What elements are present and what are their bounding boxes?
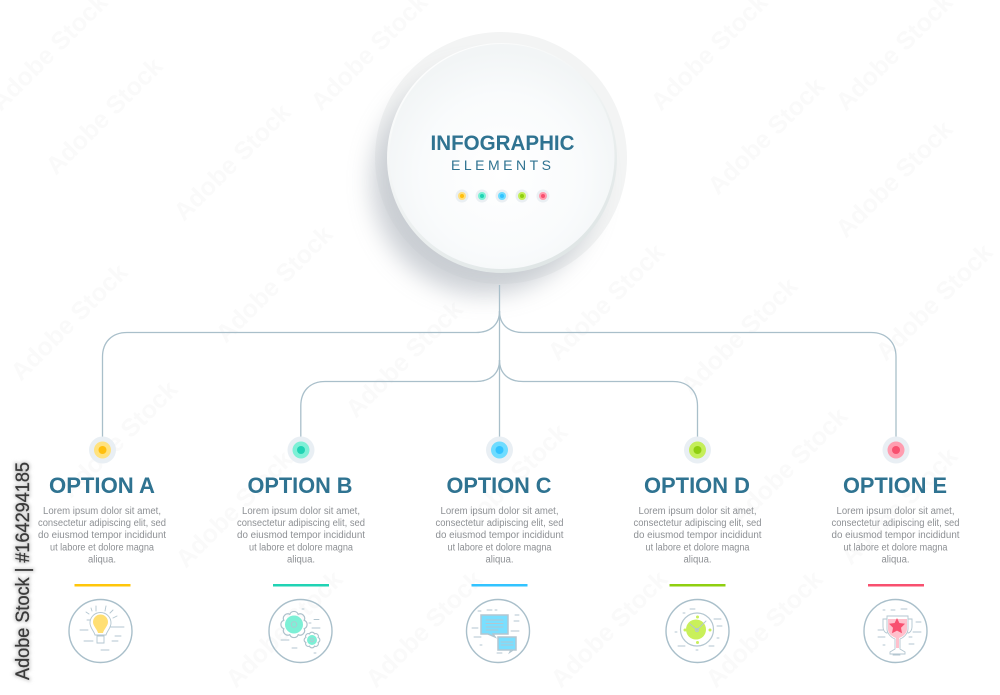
- text: Adobe Stock: [40, 52, 168, 180]
- icon: light bulb: [69, 600, 132, 662]
- text: Adobe Stock: [675, 272, 803, 400]
- icon: clock: [666, 600, 729, 662]
- text: Adobe Stock: [870, 238, 998, 366]
- body E: Lorem ipsum dolor sit amet,: [836, 506, 954, 517]
- body B: do eiusmod tempor incididunt: [237, 530, 365, 541]
- side credit text: Adobe Stock | #164294185: [13, 462, 34, 680]
- text: Adobe Stock: [545, 565, 673, 693]
- body B: aliqua.: [287, 554, 315, 566]
- subtitle: elements: ELEMENTS: [451, 157, 551, 173]
- heading D: OPTION D: [644, 473, 750, 498]
- body A: [38, 506, 166, 566]
- option B column: [237, 436, 365, 662]
- text: Adobe Stock: [340, 295, 468, 423]
- marker B: [288, 436, 314, 464]
- body B: ut labore et dolore magna: [249, 542, 353, 554]
- text: Adobe Stock: [445, 418, 573, 546]
- text: Adobe Stock: [725, 402, 853, 530]
- accent bar A: [74, 584, 130, 586]
- text: Adobe Stock: [168, 98, 296, 226]
- connector lines: [102, 285, 896, 438]
- text: Adobe Stock: [170, 445, 298, 573]
- body D: consectetur adipiscing elit, sed: [634, 518, 762, 529]
- text: Adobe Stock: [830, 115, 958, 243]
- body C: aliqua.: [486, 554, 514, 566]
- body A: Lorem ipsum dolor sit amet,: [43, 506, 161, 517]
- marker C: [486, 436, 513, 464]
- option E column: [832, 436, 960, 662]
- accent bar E: [868, 584, 924, 586]
- body E: consectetur adipiscing elit, sed: [832, 518, 960, 529]
- icon: gears: [269, 600, 332, 662]
- marker E: [882, 436, 910, 464]
- body D: Lorem ipsum dolor sit amet,: [638, 506, 756, 517]
- body A: consectetur adipiscing elit, sed: [38, 518, 166, 529]
- heading C: OPTION C: [446, 473, 552, 498]
- body D: do eiusmod tempor incididunt: [634, 530, 762, 541]
- body E: do eiusmod tempor incididunt: [832, 530, 960, 541]
- body C: ut labore et dolore magna: [448, 542, 552, 554]
- body D: ut labore et dolore magna: [646, 542, 750, 554]
- body A: do eiusmod tempor incididunt: [38, 530, 166, 541]
- heading E: OPTION E: [843, 473, 947, 498]
- body C: consectetur adipiscing elit, sed: [436, 518, 564, 529]
- marker A: [89, 436, 116, 464]
- body A: aliqua.: [88, 554, 116, 566]
- option A column: [38, 436, 166, 662]
- icon: trophy: [864, 600, 927, 662]
- accent bar C: [472, 584, 528, 586]
- body B: [237, 506, 365, 566]
- central circle: [372, 32, 627, 294]
- icon: speech bubbles: [466, 600, 530, 662]
- body B: Lorem ipsum dolor sit amet,: [242, 506, 360, 517]
- text: Adobe Stock: [700, 565, 828, 693]
- option D column: [634, 436, 762, 662]
- body E: [832, 506, 960, 566]
- text: Adobe Stock: [360, 565, 488, 693]
- side credit text: Adobe Stock | #164294185: [13, 462, 34, 680]
- text: Adobe Stock: [220, 565, 348, 693]
- body D: aliqua.: [684, 554, 712, 566]
- central colour dots: [456, 190, 550, 202]
- body C: Lorem ipsum dolor sit amet,: [440, 506, 558, 517]
- body C: [436, 506, 564, 566]
- body D: [634, 506, 762, 566]
- text: Adobe Stock: [542, 238, 670, 366]
- body B: consectetur adipiscing elit, sed: [237, 518, 365, 529]
- body E: ut labore et dolore magna: [844, 542, 948, 554]
- accent bar B: [273, 584, 329, 586]
- text: Adobe Stock: [5, 258, 133, 386]
- text: Adobe Stock: [210, 220, 338, 348]
- heading A: OPTION A: [49, 473, 155, 498]
- body A: ut labore et dolore magna: [50, 542, 154, 554]
- marker D: [684, 436, 711, 464]
- option C column: [436, 436, 564, 662]
- text: Adobe Stock: [702, 72, 830, 200]
- heading B: OPTION B: [248, 473, 352, 498]
- title: infographic: INFOGRAPHIC: [430, 132, 574, 155]
- body E: aliqua.: [882, 554, 910, 566]
- text: Adobe Stock: [55, 375, 183, 503]
- body C: do eiusmod tempor incididunt: [436, 530, 564, 541]
- accent bar D: [670, 584, 726, 586]
- text: Adobe Stock: [835, 442, 963, 570]
